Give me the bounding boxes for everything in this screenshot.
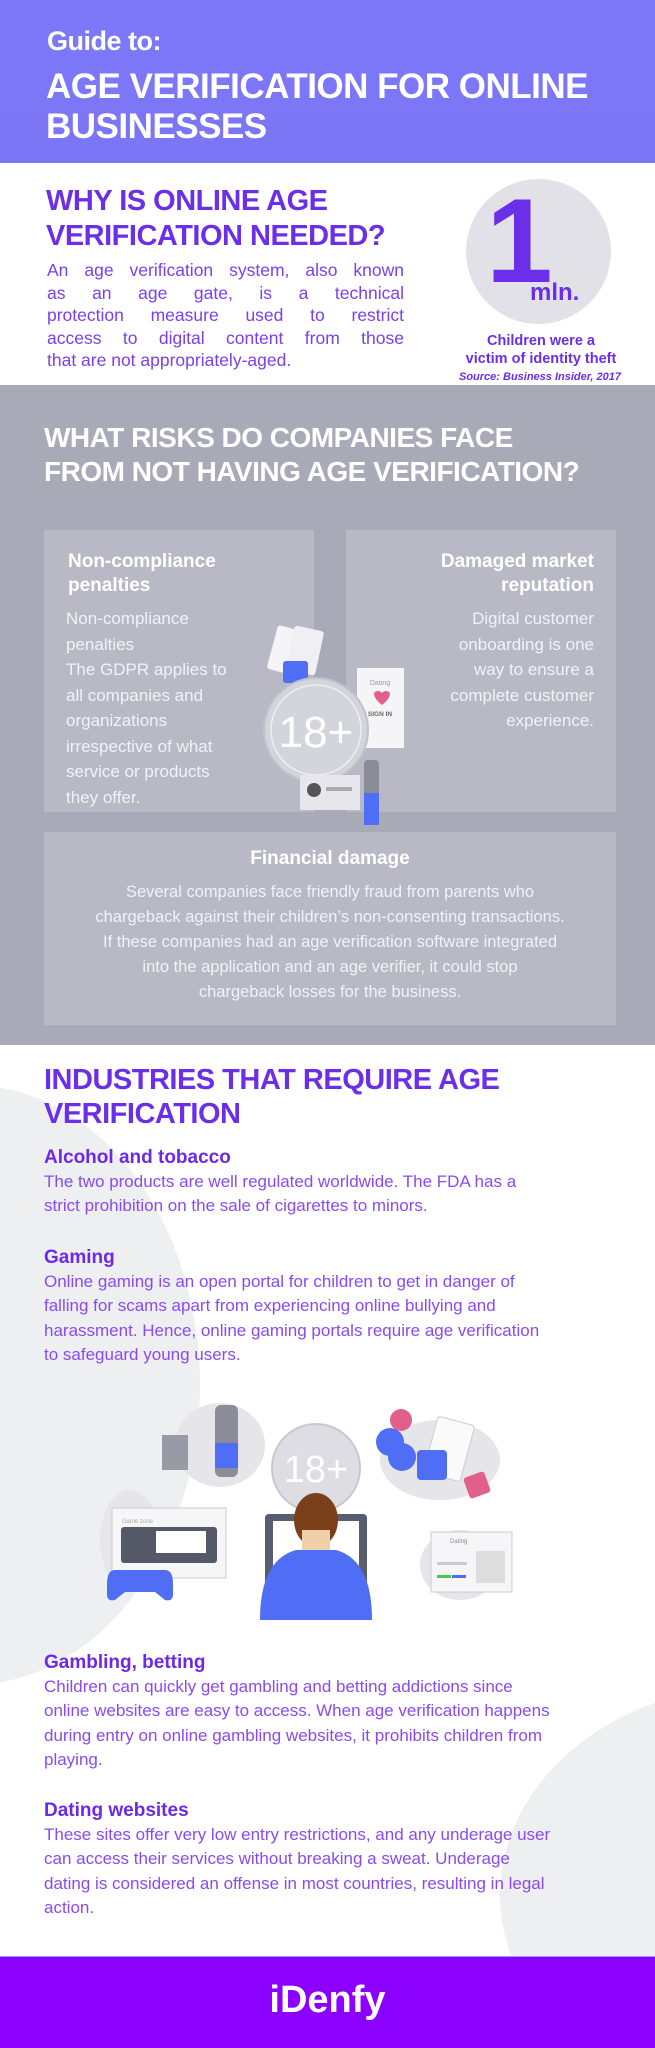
item: dating <box>44 1800 550 1917</box>
panel: financial damage <box>44 832 616 1025</box>
panel: financial damage: If these companies had an age verification software integrated <box>103 933 557 951</box>
paragraph: age verification definition: that are not appropriately-aged. <box>47 350 291 370</box>
paragraph: age verification definition: An age verification system, also known <box>47 260 404 280</box>
heading: risks: FROM NOT HAVING AGE VERIFICATION? <box>44 456 579 487</box>
illustration: 18+ badge with cards, dating, id <box>263 626 404 825</box>
panel: non-compliance: penalties <box>68 575 150 596</box>
source: Source: Business Insider, 2017 <box>459 371 621 383</box>
stat caption <box>466 333 616 367</box>
heading: risks: WHAT RISKS DO COMPANIES FACE <box>44 422 513 453</box>
section: risks <box>0 385 655 1045</box>
item: alcohol and tobacco <box>44 1147 516 1215</box>
illustration: person at laptop with icons: Game zone <box>122 1519 154 1525</box>
panel: non-compliance: Non-compliance <box>68 551 216 572</box>
panel: damaged reputation: complete customer <box>450 686 594 704</box>
paragraph: age verification definition <box>47 260 404 370</box>
heading: why needed: VERIFICATION NEEDED? <box>46 220 385 252</box>
panel: non-compliance <box>44 530 314 812</box>
heading: risks <box>44 422 579 487</box>
panel: financial damage: Financial damage <box>250 848 410 869</box>
footer <box>0 1956 655 2048</box>
illustration: 18+ badge with cards, dating, id: SIGN IN <box>368 711 392 718</box>
header banner <box>0 0 655 163</box>
heading: industries: INDUSTRIES THAT REQUIRE AGE <box>44 1064 499 1096</box>
item: gaming <box>44 1247 539 1364</box>
main title: BUSINESSES <box>46 107 267 146</box>
item: alcohol and tobacco: The two products are well regulated worldwide. The FDA has a <box>44 1172 516 1191</box>
illustration: person at laptop with icons: Dating <box>450 1539 467 1545</box>
item: gambling: playing. <box>44 1750 103 1769</box>
panel: financial damage: Several companies face friendly fraud from parents who <box>126 883 534 901</box>
panel: damaged reputation: Damaged market <box>441 551 594 572</box>
panel: financial damage: into the application and an age verifier, it could stop <box>142 958 518 976</box>
illustration: person at laptop with icons <box>100 1403 512 1620</box>
item: alcohol and tobacco: Alcohol and tobacco <box>44 1147 231 1168</box>
panel: non-compliance: penalties <box>66 634 134 654</box>
illustration: person at laptop with icons: 18+ <box>284 1449 348 1491</box>
paragraph: age verification definition: as an age gate, is a technical <box>47 282 404 302</box>
panel: damaged reputation: experience. <box>506 711 594 730</box>
heading: industries: VERIFICATION <box>44 1098 240 1130</box>
item: gaming: falling for scams apart from experiencing online bullying and <box>44 1296 496 1315</box>
item: gaming: to safeguard young users. <box>44 1345 241 1364</box>
item: gambling: Gambling, betting <box>44 1652 206 1673</box>
stat caption: victim of identity theft <box>466 351 616 367</box>
item: gambling: online websites are easy to access. When age verification happens <box>44 1701 550 1720</box>
panel: non-compliance: The GDPR applies to all companies and organizations irrespective of what service or products they offer. <box>66 660 227 806</box>
main title <box>46 67 588 146</box>
item: alcohol and tobacco: strict prohibition on the sale of cigarettes to minors. <box>44 1196 428 1215</box>
item: dating: action. <box>44 1898 94 1917</box>
paragraph: age verification definition: access to digital content from those <box>47 328 404 348</box>
heading: why needed <box>46 185 385 252</box>
item: gambling <box>44 1652 550 1769</box>
illustration: 18+ badge with cards, dating, id: 18+ <box>279 708 353 757</box>
logo: iDenfy: iDenfy <box>269 1979 386 2021</box>
item: dating: Dating websites <box>44 1800 189 1821</box>
panel: damaged reputation: onboarding is one <box>459 634 594 654</box>
item: gaming: Gaming <box>44 1247 115 1268</box>
panel: non-compliance: Non-compliance <box>66 609 189 628</box>
item: gaming: harassment. Hence, online gaming portals require age verification <box>44 1321 539 1340</box>
item: gambling: during entry on online gambling websites, it prohibits children from <box>44 1726 542 1745</box>
illustration: 18+ badge with cards, dating, id: Dating <box>370 680 390 687</box>
section: why needed <box>0 163 655 385</box>
item: gaming: Online gaming is an open portal for children to get in danger of <box>44 1272 515 1291</box>
panel: damaged reputation: Digital customer <box>472 609 594 628</box>
item: dating: can access their services without breaking a sweat. Underage <box>44 1849 510 1868</box>
panel: damaged reputation <box>346 530 616 812</box>
item: dating: dating is considered an offense in most countries, resulting in legal <box>44 1874 545 1893</box>
heading: why needed: WHY IS ONLINE AGE <box>46 185 328 217</box>
paragraph: age verification definition: protection measure used to restrict <box>47 305 404 325</box>
stat circle: 1 mln: mln. <box>530 279 579 306</box>
panel: damaged reputation: reputation <box>501 575 594 596</box>
main title: AGE VERIFICATION FOR ONLINE <box>46 67 588 106</box>
item: dating: These sites offer very low entry restrictions, and any underage user <box>44 1825 550 1844</box>
panel: financial damage: chargeback losses for the business. <box>199 983 461 1001</box>
item: gambling: Children can quickly get gambling and betting addictions since <box>44 1677 513 1696</box>
subtitle: guide to: Guide to: <box>47 26 161 56</box>
panel: financial damage: chargeback against their children’s non-consenting transactions. <box>95 908 565 926</box>
panel: damaged reputation: way to ensure a <box>474 660 594 679</box>
stat circle: 1 mln: 1 <box>486 174 553 308</box>
heading: industries <box>44 1064 499 1130</box>
decorative blobs <box>0 1085 200 1685</box>
stat circle: 1 mln <box>466 179 611 324</box>
section: industries <box>0 1045 655 1956</box>
stat caption: Children were a <box>487 333 595 349</box>
